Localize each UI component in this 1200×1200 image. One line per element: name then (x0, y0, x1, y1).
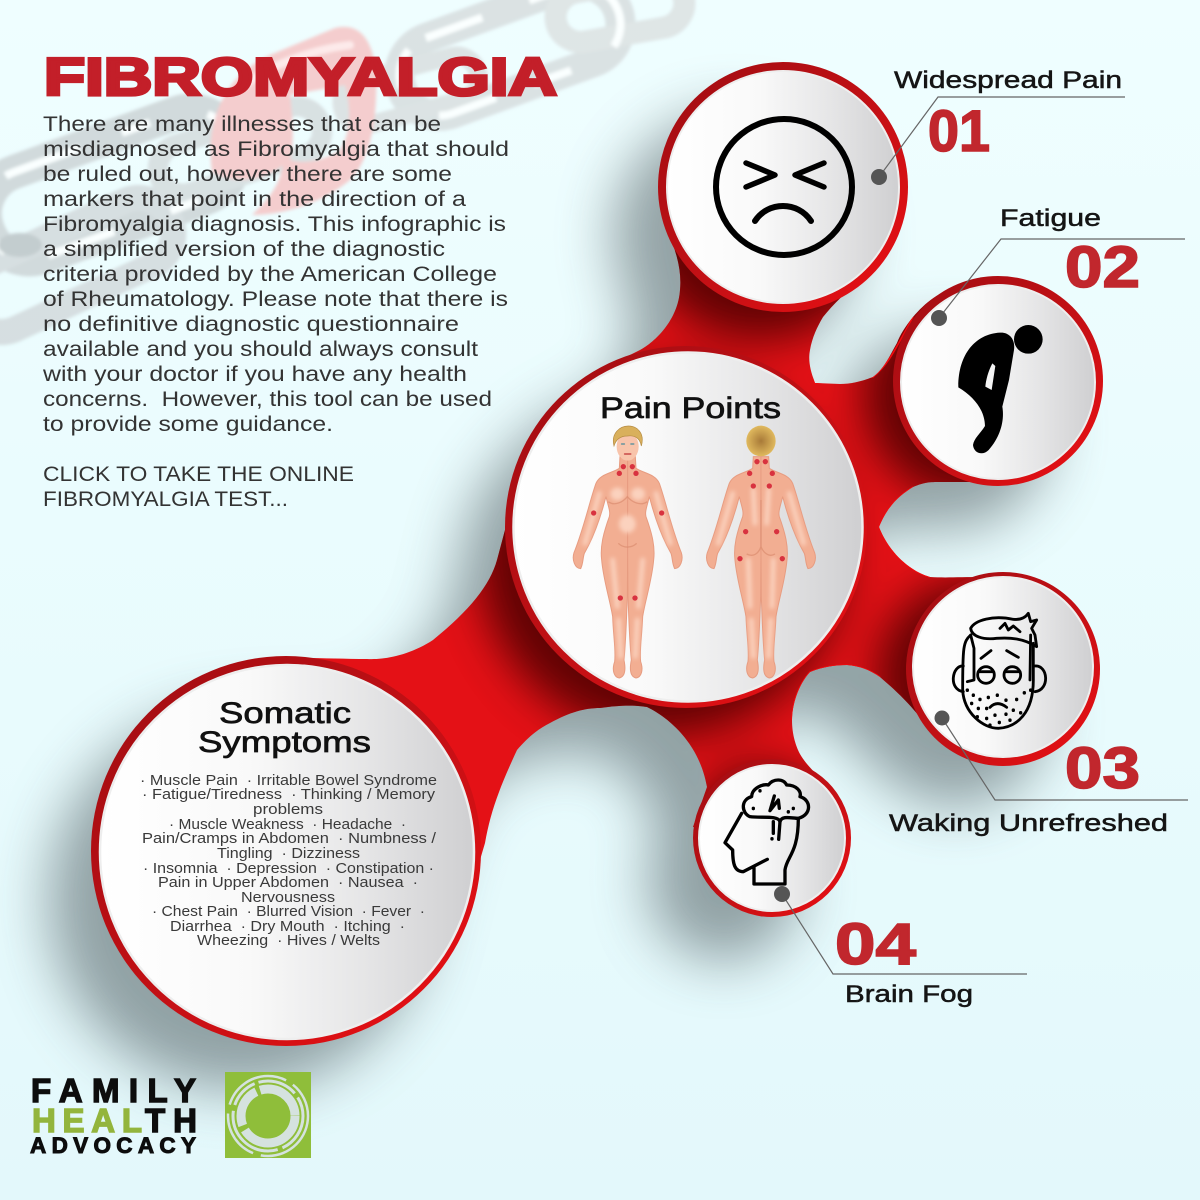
symptom list: problems (253, 802, 323, 818)
panel: circle 01 widespread pain (658, 62, 908, 312)
icon: pained face (716, 119, 852, 255)
icon: head with brain (725, 780, 809, 884)
panel: circle 02 fatigue (893, 276, 1103, 486)
intro text block: criteria provided by the American College (43, 263, 497, 286)
body diagrams with tender points (573, 426, 815, 678)
symptom list: · Insomnia · Depression · Constipation · (143, 861, 434, 877)
logo wordmark: HEAL (32, 1102, 142, 1139)
heading: somatic symptoms (198, 697, 371, 759)
symptom list: · Muscle Pain · Irritable Bowel Syndrome (140, 773, 437, 789)
symptom list (140, 773, 437, 949)
callout 01 (871, 67, 1125, 185)
symptom list: · Chest Pain · Blurred Vision · Fever · (152, 904, 425, 920)
cast shadow (49, 113, 1050, 1090)
symptom list: · Fatigue/Tiredness · Thinking / Memory (142, 787, 436, 803)
back figure (707, 426, 815, 678)
intro text block: a simplified version of the diagnostic (43, 238, 445, 261)
icon: slumped figure (958, 325, 1043, 453)
intro text block: available and you should always consult (43, 338, 478, 361)
symptom list: · Muscle Weakness · Headache · (169, 817, 406, 833)
intro text block (42, 113, 509, 511)
panel: pain points circle (505, 346, 867, 708)
symptom list: Nervousness (241, 890, 335, 906)
intro text block: CLICK TO TAKE THE ONLINE (43, 463, 354, 486)
callout 02 (931, 205, 1185, 326)
intro text block: to provide some guidance. (43, 413, 333, 436)
title: FIBROMYALGIA (44, 48, 557, 107)
callout 03 (889, 710, 1188, 837)
front figure (573, 426, 682, 678)
tender point markers (591, 459, 785, 601)
intro text block: misdiagnosed as Fibromyalgia that should (43, 138, 509, 161)
icon: tired bearded man (953, 613, 1046, 728)
heading: somatic symptoms: Symptoms (198, 726, 371, 759)
intro text block: FIBROMYALGIA TEST... (43, 488, 288, 511)
red connected shape (314, 248, 972, 858)
intro text block: concerns. However, this tool can be used (43, 388, 492, 411)
heading: somatic symptoms: Somatic (219, 697, 351, 730)
logo wordmark (30, 1072, 197, 1158)
callout 03: 03 (1065, 736, 1140, 801)
symptom list: Pain/Cramps in Abdomen · Numbness / (142, 831, 437, 847)
callout 04: 04 (835, 912, 916, 977)
symptom list: Diarrhea · Dry Mouth · Itching · (170, 919, 405, 935)
callout 04: Brain Fog (845, 981, 973, 1008)
intro text block: There are many illnesses that can be (43, 113, 441, 136)
panel: circle 04 brain fog (693, 759, 851, 917)
heading: pain points: Pain Points (600, 392, 781, 425)
symptom list: Tingling · Dizziness (217, 846, 360, 862)
intro text block: no definitive diagnostic questionnaire (43, 313, 459, 336)
symptom list: Wheezing · Hives / Welts (197, 933, 380, 949)
intro text block: be ruled out, however there are some (43, 163, 452, 186)
callout 02: 02 (1065, 235, 1140, 300)
logo mark (225, 1072, 311, 1158)
panel: somatic symptoms circle (91, 656, 481, 1046)
intro text block: with your doctor if you have any health (42, 363, 467, 386)
logo wordmark: ADVOCACY (30, 1133, 196, 1158)
callout 03: Waking Unrefreshed (889, 810, 1168, 837)
panel: circle 03 waking unrefreshed (906, 572, 1100, 766)
callout 02: Fatigue (1000, 205, 1101, 232)
logo wordmark: TH (145, 1102, 197, 1139)
callout 01: 01 (928, 99, 990, 164)
symptom list: Pain in Upper Abdomen · Nausea · (158, 875, 418, 891)
callout 04 (774, 886, 1027, 1008)
intro text block: Fibromyalgia diagnosis. This infographic is (43, 213, 506, 236)
intro text block: of Rheumatology. Please note that there is (43, 288, 508, 311)
callout 01: Widespread Pain (894, 67, 1122, 94)
logo wordmark: FAMILY (31, 1072, 196, 1109)
intro text block: markers that point in the direction of a (43, 188, 466, 211)
background chain illustration (0, 0, 688, 343)
